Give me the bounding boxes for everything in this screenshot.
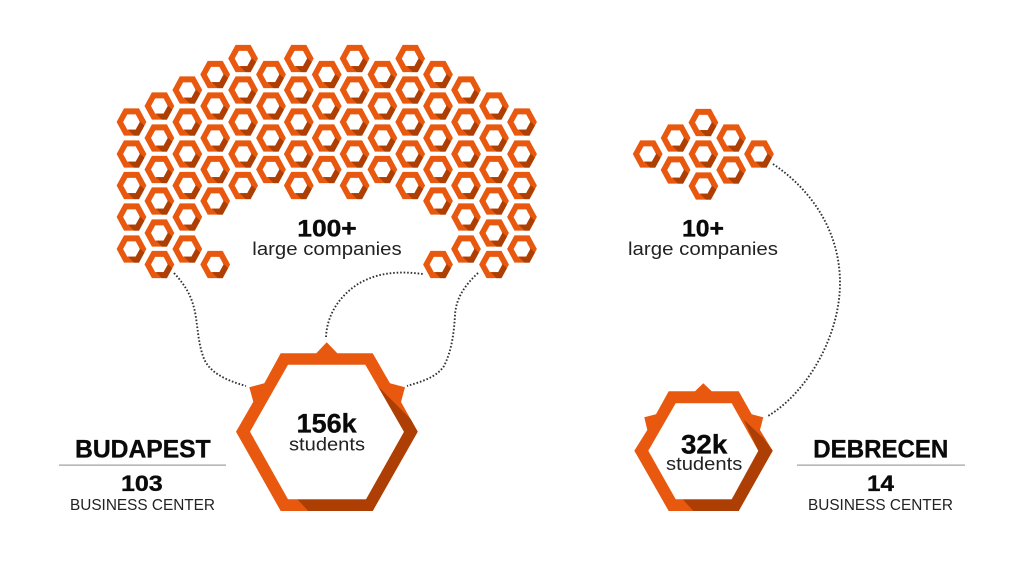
column 15 <box>507 108 537 263</box>
city block: Debrecen: DEBRECEN <box>813 435 948 463</box>
column 4 <box>200 61 230 278</box>
column 1 <box>117 108 146 263</box>
connector: right cluster to Budapest hexagon <box>407 273 478 386</box>
hexagon cluster: Budapest companies <box>117 45 537 278</box>
connector: Debrecen cluster to Debrecen hexagon <box>768 164 840 416</box>
value: 32k: 32k <box>681 429 728 459</box>
column 14 <box>479 92 509 278</box>
city block: Budapest <box>59 435 226 514</box>
city block: Budapest: BUDAPEST <box>75 435 211 463</box>
connector: centre hexagon to Budapest hexagon <box>326 273 423 337</box>
column 5 <box>228 45 258 199</box>
city block: Budapest: BUSINESS CENTER <box>70 497 215 514</box>
label: students: students <box>289 435 365 455</box>
label: students: students <box>666 454 742 474</box>
hexagon cluster: Debrecen companies <box>633 109 774 200</box>
text: 10+ large companies <box>628 216 778 259</box>
city block: Debrecen <box>797 435 965 514</box>
text: 100+ large companies <box>252 216 402 259</box>
large hexagon: Debrecen students <box>634 383 773 511</box>
text: 100+ large companies: 100+ <box>297 216 357 243</box>
column 2 <box>144 92 174 278</box>
column 11 <box>395 45 425 199</box>
large hexagon: Budapest students <box>236 342 418 511</box>
city block: Budapest: 103 <box>121 471 163 496</box>
column 6 <box>256 61 286 183</box>
column 7 <box>284 45 314 199</box>
column 9 <box>340 45 370 199</box>
column 10 <box>368 61 397 183</box>
text: 10+ large companies: large companies <box>628 239 778 259</box>
connector: left cluster to Budapest hexagon <box>174 273 246 386</box>
column 8 <box>312 61 342 183</box>
column 3 <box>172 76 202 263</box>
city block: Debrecen: 14 <box>867 471 895 496</box>
value: 156k: 156k <box>297 409 357 439</box>
text: 100+ large companies: large companies <box>252 239 402 259</box>
text: 10+ large companies: 10+ <box>682 216 724 243</box>
column 12 <box>423 61 453 278</box>
column 13 <box>451 76 481 263</box>
city block: Debrecen: BUSINESS CENTER <box>808 497 953 514</box>
